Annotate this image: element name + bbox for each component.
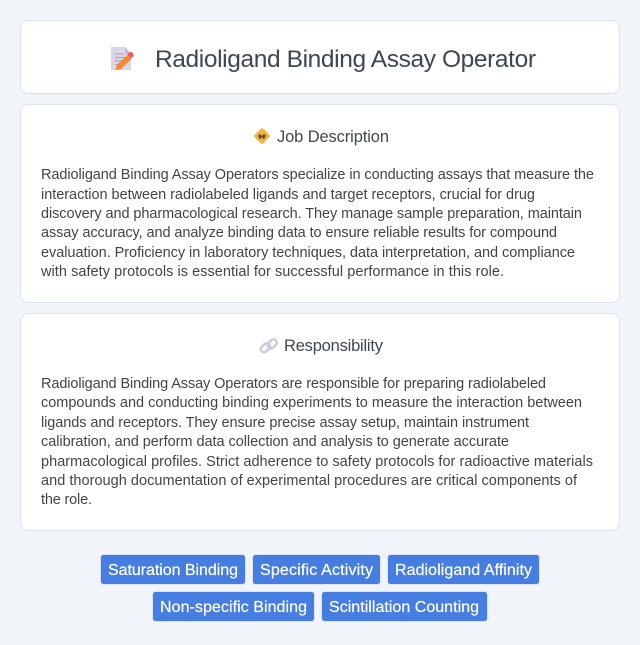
tag: non-specific binding xyxy=(152,592,314,622)
text block: responsibility: the role. xyxy=(41,492,92,508)
panel: responsibility xyxy=(20,314,620,530)
tag: scintillation counting xyxy=(322,592,488,622)
tag: radioligand affinity: Radioligand Affinity xyxy=(395,562,532,579)
text block: job description: interaction between radiolabeled ligands and target receptors, crucial for drug xyxy=(41,187,535,203)
text block: responsibility: ligands and receptors. They ensure precise assay setup, maintain instrument xyxy=(41,415,529,431)
tag: specific activity: Specific Activity xyxy=(260,562,373,579)
text block: responsibility: Radioligand Binding Assay Operators are responsible for preparing radiolabeled xyxy=(41,376,546,392)
tag: saturation binding xyxy=(100,554,246,584)
text block: job description: evaluation. Proficiency in laboratory techniques, data interpretation, and compliance xyxy=(41,245,575,261)
text block: responsibility xyxy=(41,376,593,508)
text block: responsibility: compounds and conducting binding experiments to measure the interaction between xyxy=(41,395,582,411)
icon: diamond sign xyxy=(254,128,270,144)
heading: responsibility: Responsibility xyxy=(284,337,384,355)
tag: radioligand affinity xyxy=(388,554,540,584)
tag: specific activity xyxy=(252,554,380,584)
icon: chain link xyxy=(259,338,278,354)
panel: job description xyxy=(20,104,620,302)
heading: title: Radioligand Binding Assay Operator xyxy=(155,46,536,73)
text block: job description: Radioligand Binding Assay Operators specialize in conducting assays that measure the xyxy=(41,167,594,183)
panel: title xyxy=(20,20,620,94)
text block: job description: with safety protocols is essential for successful performance in this role. xyxy=(40,264,504,280)
heading: job description: Job Description xyxy=(277,128,389,146)
icon: document with pencil xyxy=(111,47,134,70)
tag: non-specific binding: Non-specific Binding xyxy=(160,599,307,616)
tag row xyxy=(100,554,540,622)
tag: saturation binding: Saturation Binding xyxy=(108,562,238,579)
text block: job description xyxy=(40,167,594,280)
text block: responsibility: calibration, and perform data collection and analysis to generate accurate xyxy=(41,434,509,450)
tag: scintillation counting: Scintillation Counting xyxy=(329,599,479,616)
text block: responsibility: pharmacological profiles. Strict adherence to safety protocols for radioactive materials xyxy=(41,454,593,470)
text block: job description: assay accuracy, and analyze binding data to ensure reliable results for compound xyxy=(41,225,557,241)
text block: job description: discovery and pharmacological research. They manage sample preparation, maintain xyxy=(41,206,582,222)
text block: responsibility: and thorough documentation of experimental procedures are critical components of xyxy=(41,473,578,489)
